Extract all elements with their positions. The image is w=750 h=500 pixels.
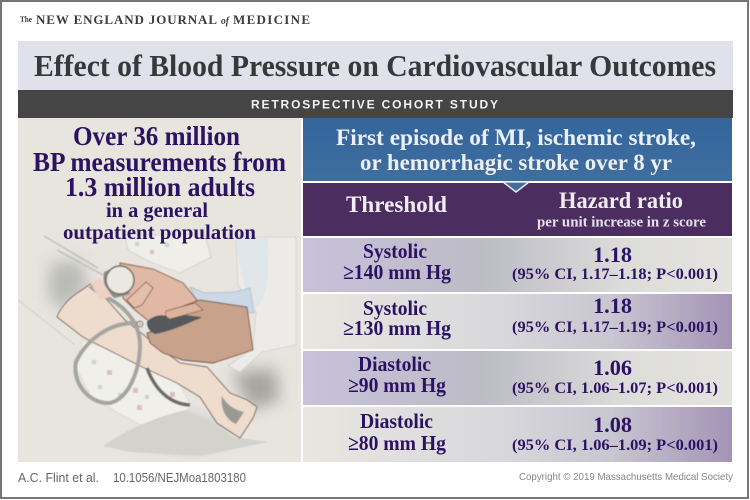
row: diastolic 80: (95% CI, 1.06–1.09; P<0.001): [512, 437, 718, 454]
bulb: [147, 315, 202, 334]
journal masthead: of: [221, 16, 231, 27]
left headline: outpatient population: [63, 220, 256, 244]
row: diastolic 90: Diastolic: [358, 352, 431, 376]
patient arm and hand: [57, 283, 257, 438]
citation: A.C. Flint et al.: [18, 471, 99, 485]
doctor coat: [228, 237, 296, 372]
row: systolic 130: ≥130 mm Hg: [343, 316, 451, 340]
left headline: [33, 121, 286, 244]
doctor lower hand: [147, 300, 253, 363]
illustration: blood pressure measurement: [18, 235, 296, 456]
notch arrow: [503, 182, 529, 192]
tube connector: [137, 321, 143, 327]
table header: Threshold: [346, 192, 447, 218]
study type bar: RETROSPECTIVE COHORT STUDY: [251, 98, 498, 112]
row: systolic 130: 1.18: [593, 293, 632, 318]
row: systolic 140: Systolic: [363, 239, 427, 263]
fingers: [127, 282, 153, 308]
row: systolic 130: Systolic: [363, 296, 427, 320]
left headline: in a general: [106, 198, 208, 222]
row: diastolic 80: 1.08: [593, 412, 632, 437]
row: systolic 140: ≥140 mm Hg: [343, 260, 451, 284]
row: systolic 130: (95% CI, 1.17–1.19; P<0.001): [512, 319, 718, 336]
row: diastolic 80: ≥80 mm Hg: [348, 431, 446, 455]
journal masthead: NEW ENGLAND JOURNAL: [36, 12, 217, 27]
doctor upper hand: [120, 263, 197, 322]
table header: [303, 182, 732, 236]
hand shadow: [222, 396, 244, 424]
journal masthead: MEDICINE: [233, 12, 310, 27]
row: diastolic 90: ≥90 mm Hg: [348, 373, 446, 397]
left headline: BP measurements from: [33, 147, 286, 177]
row: systolic 130: [303, 293, 732, 349]
bed lines: [44, 236, 103, 275]
row: systolic 140: (95% CI, 1.17–1.18; P<0.001): [512, 266, 718, 283]
row: diastolic 90: 1.06: [593, 355, 632, 380]
tubing: [75, 286, 140, 403]
panel: outcome: or hemorrhagic stroke over 8 yr: [360, 150, 672, 176]
table header: per unit increase in z score: [537, 214, 706, 230]
row: diastolic 80: [303, 407, 732, 462]
blue cuff: [190, 287, 254, 313]
panel: study population: [18, 118, 301, 462]
citation: 10.1056/NEJMoa1803180: [113, 471, 246, 485]
citation: [18, 471, 246, 485]
row: diastolic 80: Diastolic: [360, 409, 433, 433]
journal masthead: [20, 12, 310, 27]
patient gown: [125, 235, 211, 273]
row: systolic 140: [303, 238, 732, 292]
gauge: [103, 266, 130, 298]
left headline: 1.3 million adults: [65, 172, 255, 202]
row: systolic 140: 1.18: [593, 242, 632, 267]
gown dots: [107, 250, 175, 410]
panel: outcome: First episode of MI, ischemic stroke,: [336, 125, 696, 151]
row: diastolic 90: [303, 351, 732, 405]
soft shading: [48, 262, 280, 448]
study type bar: [18, 90, 733, 118]
title: Effect of Blood Pressure on Cardiovascular Outcomes: [34, 48, 716, 83]
panel: outcome: [303, 118, 732, 181]
table header: Hazard ratio: [559, 188, 683, 214]
blanket fold: [103, 410, 268, 456]
left headline: Over 36 million: [73, 121, 240, 151]
copyright: Copyright © 2019 Massachusetts Medical Society: [519, 471, 734, 483]
row: diastolic 90: (95% CI, 1.06–1.07; P<0.001): [512, 380, 718, 397]
title band: [18, 41, 733, 90]
journal masthead: The: [20, 15, 32, 24]
